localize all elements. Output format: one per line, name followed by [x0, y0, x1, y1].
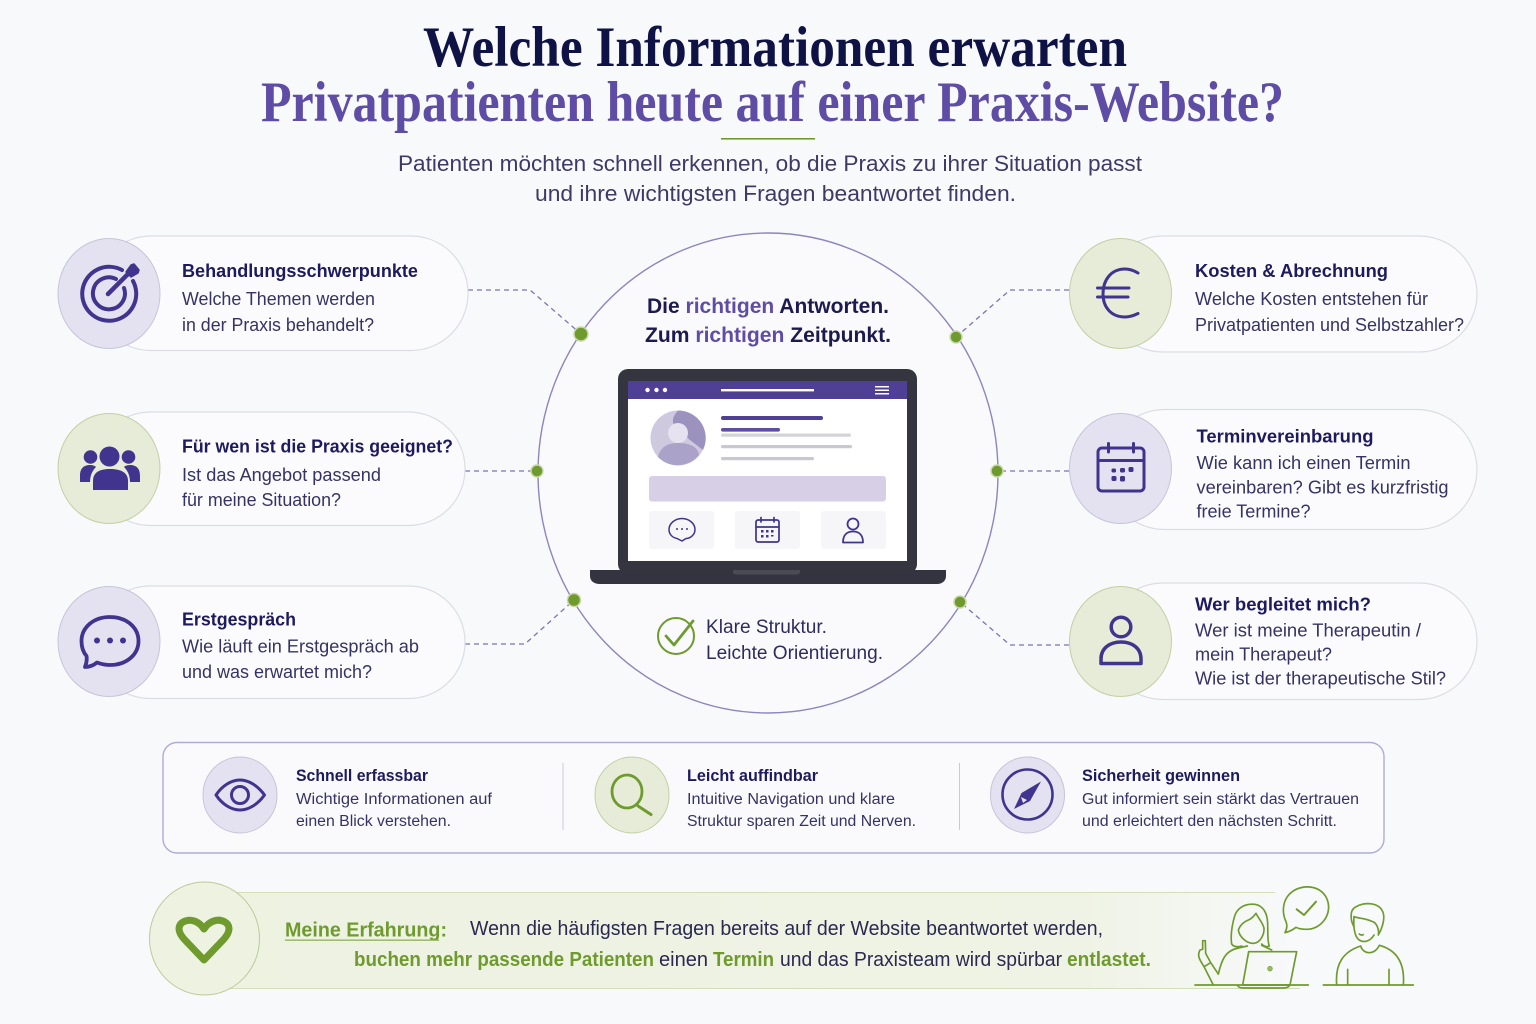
- panel: Erstgespräch: und was erwartet mich?: [182, 662, 372, 682]
- central headline: Zum richtigen Zeitpunkt.: [645, 324, 891, 347]
- laptop illustration: [590, 369, 946, 584]
- panel: Wer begleitet mich?: Wie ist der therapeutische Stil?: [1195, 668, 1446, 688]
- man: [1323, 904, 1413, 985]
- benefit: Sicherheit gewinnen: Sicherheit gewinnen: [1082, 767, 1240, 785]
- panel: Behandlungsschwerpunkte: [58, 236, 468, 350]
- check mark and claim: Leichte Orientierung.: [706, 643, 883, 664]
- laptop base: [590, 570, 946, 584]
- panel: Für wen ist die Praxis geeignet?: für meine Situation?: [182, 490, 341, 510]
- check mark and claim: Klare Struktur.: [706, 617, 827, 638]
- call to action bar: [649, 476, 886, 502]
- panel: Kosten und Abrechnung: Privatpatienten und Selbstzahler?: [1195, 315, 1464, 335]
- banner text: Termin: [713, 949, 774, 971]
- panel: Terminvereinbarung: Terminvereinbarung: [1196, 426, 1374, 446]
- benefit: Sicherheit gewinnen: und erleichtert den nächsten Schritt.: [1082, 813, 1337, 830]
- banner text: buchen mehr passende Patienten: [354, 949, 654, 971]
- icon: heart: [179, 920, 229, 960]
- browser header bar: [628, 381, 907, 399]
- benefit: Leicht auffindbar: Struktur sparen Zeit und Nerven.: [687, 813, 916, 830]
- panel: Behandlungsschwerpunkte: Welche Themen werden: [182, 289, 375, 309]
- panel: Für wen ist die Praxis geeignet?: Für wen ist die Praxis geeignet?: [182, 436, 453, 456]
- title: Welche Informationen erwarten: [423, 16, 1127, 79]
- title underline: [721, 138, 815, 140]
- check mark and claim: [658, 617, 883, 664]
- central circle: [538, 233, 998, 713]
- panel: Behandlungsschwerpunkte: in der Praxis behandelt?: [182, 315, 374, 335]
- banner text: und das Praxisteam wird spürbar: [780, 949, 1062, 971]
- title: [261, 16, 1284, 134]
- panel: Für wen ist die Praxis geeignet?: Ist das Angebot passend: [182, 465, 381, 485]
- banner text: Wenn die häufigsten Fragen bereits auf der Website beantwortet werden,: [470, 918, 1103, 940]
- speech bubble with check: [1283, 887, 1329, 933]
- benefit: Leicht auffindbar: Leicht auffindbar: [687, 767, 819, 785]
- connector lines: [465, 290, 1069, 645]
- panel: benefits strip: [163, 742, 1384, 853]
- banner text: einen: [659, 949, 708, 971]
- benefit: Schnell erfassbar: Schnell erfassbar: [296, 767, 429, 785]
- panel: Wer begleitet mich?: mein Therapeut?: [1195, 644, 1332, 664]
- profile avatar: [650, 410, 706, 466]
- panel: Wer begleitet mich?: Wer ist meine Therapeutin /: [1195, 620, 1421, 640]
- benefit: Schnell erfassbar: einen Blick verstehen.: [296, 813, 451, 830]
- panel: Kosten und Abrechnung: Kosten & Abrechnung: [1195, 260, 1388, 281]
- benefit: Sicherheit gewinnen: Gut informiert sein stärkt das Vertrauen: [1082, 791, 1359, 808]
- illustration: consultation: [1195, 887, 1413, 988]
- banner text: entlastet.: [1067, 949, 1151, 971]
- panel: Terminvereinbarung: Wie kann ich einen Termin: [1196, 453, 1410, 473]
- icon: euro: [1098, 269, 1138, 317]
- benefit: Sicherheit gewinnen: [990, 757, 1359, 833]
- panel: Wer begleitet mich?: [1070, 583, 1477, 700]
- title: Privatpatienten heute auf einer Praxis-Website?: [261, 71, 1284, 134]
- panel: Behandlungsschwerpunkte: Behandlungsschwerpunkte: [182, 260, 418, 281]
- panel: Erstgespräch: [58, 586, 465, 698]
- panel: Terminvereinbarung: [1070, 410, 1477, 530]
- icon: group of people: [80, 446, 140, 490]
- central headline: Die richtigen Antworten.: [647, 295, 889, 318]
- panel: Erstgespräch: Wie läuft ein Erstgespräch ab: [182, 636, 419, 656]
- icon: calendar: [1098, 444, 1144, 491]
- woman with laptop: [1195, 904, 1308, 988]
- subtitle: und ihre wichtigsten Fragen beantwortet finden.: [535, 181, 1016, 206]
- laptop icon tiles: [649, 511, 886, 549]
- panel: Für wen ist die Praxis geeignet?: [58, 412, 465, 526]
- panel: Wer begleitet mich?: Wer begleitet mich?: [1195, 594, 1371, 614]
- benefit: Leicht auffindbar: Intuitive Navigation und klare: [687, 791, 895, 808]
- banner text: Meine Erfahrung:: [285, 920, 447, 942]
- panel: Terminvereinbarung: freie Termine?: [1196, 502, 1310, 522]
- banner text: [285, 918, 1151, 971]
- subtitle: Patienten möchten schnell erkennen, ob die Praxis zu ihrer Situation passt: [398, 151, 1142, 176]
- central headline: [645, 295, 891, 347]
- panel: Erstgespräch: Erstgespräch: [182, 608, 296, 630]
- connector dots: [531, 327, 1003, 608]
- banner: Meine Erfahrung: [150, 882, 1300, 995]
- icon: speech bubble: [82, 617, 138, 667]
- benefit: Schnell erfassbar: Wichtige Informationen auf: [296, 791, 493, 808]
- icon: target: [82, 264, 139, 321]
- benefit: Schnell erfassbar: [203, 757, 493, 833]
- icon: person: [1101, 617, 1141, 664]
- panel: Terminvereinbarung: vereinbaren? Gibt es kurzfristig: [1196, 478, 1448, 498]
- benefit: Leicht auffindbar: [595, 757, 916, 833]
- profile text lines: [721, 416, 852, 460]
- panel: Kosten und Abrechnung: Welche Kosten entstehen für: [1195, 289, 1428, 309]
- panel: Kosten und Abrechnung: [1070, 236, 1477, 352]
- subtitle: [398, 151, 1142, 206]
